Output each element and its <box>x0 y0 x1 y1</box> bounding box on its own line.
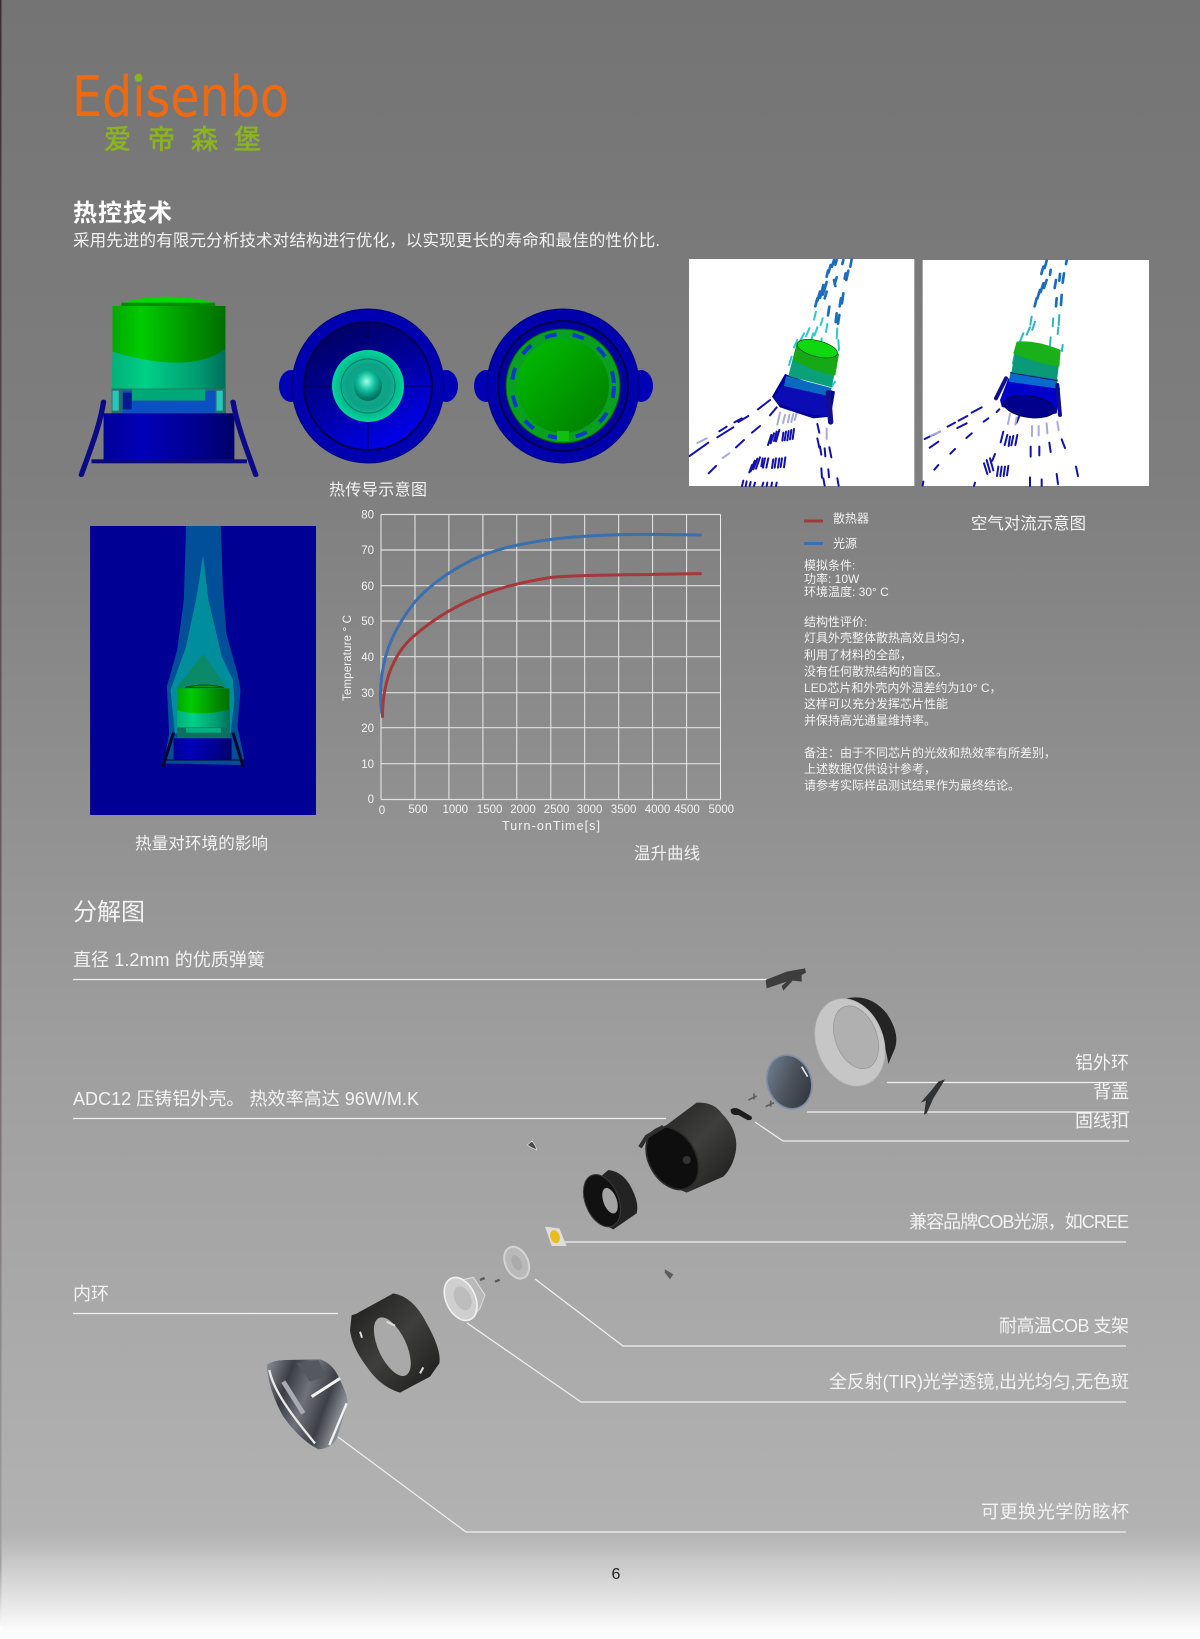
part: COB holder <box>499 1243 534 1283</box>
x axis title: Turn-onTime[s] <box>502 819 600 833</box>
curve: heat sink <box>383 574 700 717</box>
x axis labels: 2000 <box>510 804 536 816</box>
label: anti-glare cup <box>338 1437 1129 1532</box>
page number: 6 <box>612 1566 621 1583</box>
x axis labels: 4500 <box>674 804 700 816</box>
label: cable clip <box>755 1111 1129 1141</box>
panel: air convection 1 <box>689 259 914 486</box>
text block: simulation notes: 并保持高光通量维持率。 <box>804 712 936 728</box>
label: aluminium outer ring: 铝外环 <box>1075 1053 1129 1073</box>
logo <box>72 65 289 155</box>
x axis labels: 3500 <box>611 804 636 816</box>
intro text: 采用先进的有限元分析技术对结构进行优化，以实现更长的寿命和最佳的性价比. <box>73 231 660 250</box>
text block: simulation notes: 结构性评价: <box>804 614 867 629</box>
y axis labels: 30 <box>361 688 374 700</box>
part: inner threaded ring <box>576 1169 637 1232</box>
part: small screw <box>527 1141 537 1150</box>
x axis labels: 3000 <box>577 804 602 816</box>
lamp back view thermal <box>474 309 653 463</box>
label: back cover: 背盖 <box>1093 1082 1129 1102</box>
text block: simulation notes: 请参考实际样品测试结果作为最终结论。 <box>804 778 1020 792</box>
y axis labels: 20 <box>361 723 374 735</box>
label: inner ring: 内环 <box>73 1284 109 1304</box>
text block: simulation notes: 没有任何散热结构的盲区。 <box>804 664 948 678</box>
logo: 爱 <box>104 125 131 155</box>
part: small bolt <box>665 1269 673 1279</box>
x axis labels: 5000 <box>709 804 734 816</box>
text block: simulation notes: 利用了材料的全部， <box>804 647 912 662</box>
text block: simulation notes: 环境温度: 30° C <box>804 584 889 599</box>
lamp front view thermal <box>279 309 458 463</box>
x axis labels: 2500 <box>544 804 569 816</box>
part: TIR lens <box>438 1272 485 1326</box>
text block: simulation notes: 上述数据仅供设计参考， <box>804 761 936 776</box>
text block: simulation notes: LED芯片和外壳内外温差约为10° C， <box>804 680 1002 695</box>
text block: simulation notes: 模拟条件: <box>804 558 855 572</box>
part: screws <box>748 1093 774 1107</box>
panel: heat effect on environment <box>90 526 316 815</box>
text block: simulation notes: 这样可以充分发挥芯片性能 <box>804 696 948 711</box>
caption: heat effect: 热量对环境的影响 <box>135 834 268 853</box>
label: COB light source: 兼容品牌COB光源，如CREE <box>909 1212 1129 1232</box>
y axis labels: 60 <box>361 581 374 593</box>
y axis labels <box>361 510 374 806</box>
part: cable clip <box>731 1108 752 1120</box>
chart: temperature rise curve <box>342 510 734 833</box>
text block: simulation notes: 功率: 10W <box>804 571 860 586</box>
label: anti-glare cup: 可更换光学防眩杯 <box>981 1502 1129 1522</box>
exploded parts lower <box>267 1243 673 1449</box>
label: COB holder: 耐高温COB 支架 <box>999 1316 1129 1336</box>
label: spring: 直径 1.2mm 的优质弹簧 <box>73 950 265 970</box>
label: TIR lens: 全反射(TIR)光学透镜,出光均匀,无色斑 <box>829 1372 1129 1392</box>
label: housing: ADC12 压铸铝外壳。 热效率高达 96W/M.K <box>73 1089 419 1109</box>
caption: air convection: 空气对流示意图 <box>971 514 1086 533</box>
legend: 光源 <box>833 536 857 550</box>
logo: 森 <box>191 125 218 155</box>
legend <box>804 510 869 550</box>
heading: thermal control: 热控技术 <box>73 200 172 227</box>
x axis labels: 0 <box>379 805 385 817</box>
part: spring <box>766 968 806 991</box>
text block: simulation notes: 灯具外壳整体散热高效且均匀， <box>804 630 972 645</box>
part: second spring <box>921 1079 945 1115</box>
caption: temperature curve: 温升曲线 <box>634 845 700 863</box>
exploded parts upper <box>527 968 945 1246</box>
logo: 堡 <box>234 125 261 155</box>
y axis labels: 80 <box>361 510 374 522</box>
part: die-cast housing <box>635 1103 736 1199</box>
y axis labels: 0 <box>368 794 374 806</box>
chart grid <box>381 514 720 800</box>
legend: 散热器 <box>833 510 869 526</box>
label: TIR lens <box>467 1323 1129 1402</box>
text block: simulation notes <box>804 558 1056 792</box>
lamp side view thermal <box>81 297 256 475</box>
y axis labels: 50 <box>361 616 374 628</box>
part: outer ring <box>803 988 897 1096</box>
x axis labels: 500 <box>408 804 428 816</box>
x axis labels: 4000 <box>645 804 670 816</box>
x axis labels <box>379 804 734 817</box>
y axis labels: 40 <box>361 652 374 664</box>
part: anti-glare cup <box>267 1359 347 1449</box>
part: small screws <box>480 1278 500 1282</box>
heading: exploded view: 分解图 <box>73 899 145 926</box>
label: cable clip: 固线扣 <box>1075 1111 1129 1131</box>
part: back cover lens <box>760 1049 819 1115</box>
x axis labels: 1500 <box>477 804 502 816</box>
x axis labels: 1000 <box>443 804 468 816</box>
part: COB chip <box>545 1227 567 1246</box>
y axis title: Temperature ° C <box>342 615 354 701</box>
logo: Edisenbo <box>72 65 289 130</box>
caption: heat conduction: 热传导示意图 <box>329 480 427 499</box>
part: inner ring <box>350 1293 440 1393</box>
text block: simulation notes: 备注：由于不同芯片的光效和热效率有所差别， <box>804 745 1056 760</box>
y axis labels: 10 <box>361 759 374 771</box>
y axis labels: 70 <box>361 545 374 557</box>
panel: air convection 2 <box>923 260 1149 486</box>
logo: 帝 <box>148 125 175 155</box>
label: COB holder <box>535 1279 1129 1346</box>
curve: light source <box>381 534 700 713</box>
